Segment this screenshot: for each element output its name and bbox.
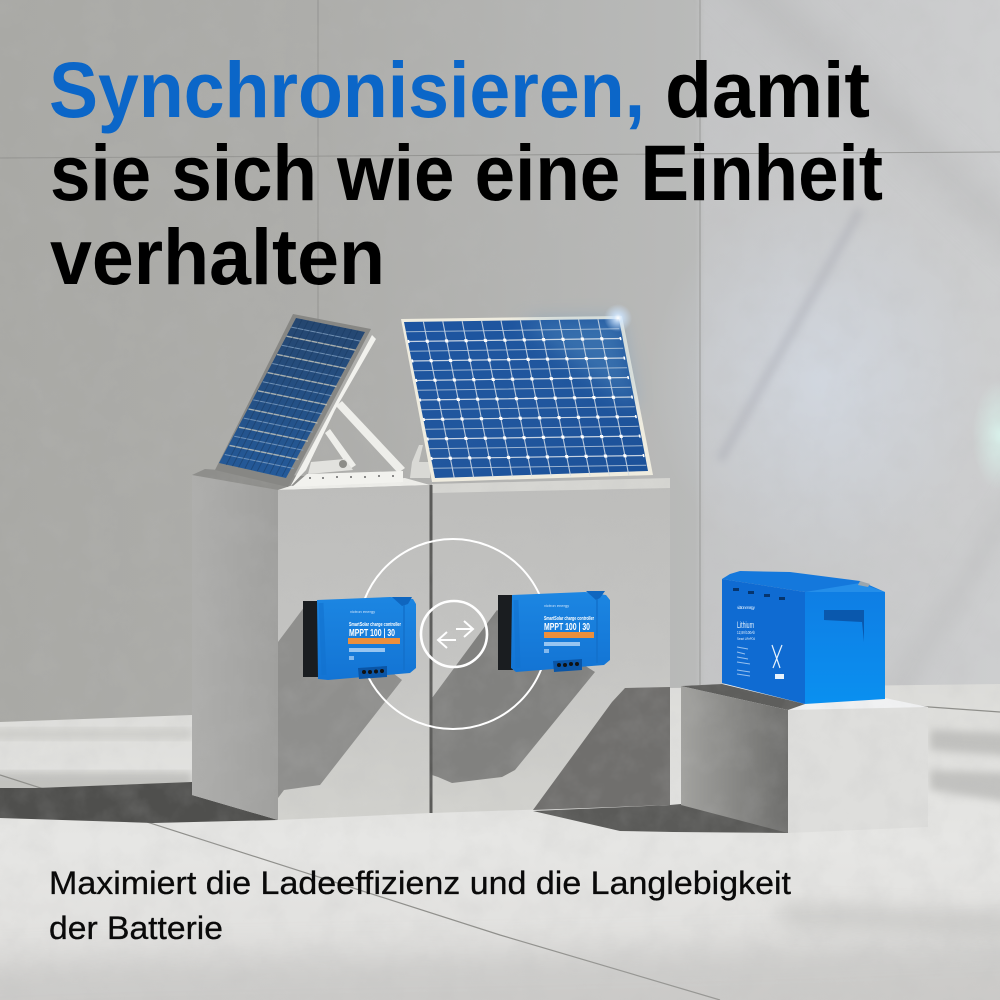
big sync ring (358, 539, 548, 729)
foot (410, 445, 430, 478)
battery block (681, 684, 928, 833)
left charge controller: MPPT 100 | 30 (349, 628, 395, 639)
right solar panel (401, 316, 653, 482)
left charge controller: victron energy (350, 609, 375, 614)
floor shadow right (533, 804, 790, 833)
cell grid (404, 319, 648, 478)
title (49, 45, 883, 301)
left solar panel with stand (215, 314, 405, 487)
subtitle: Maximiert die Ladeeffizienz und die Langlebigkeit (49, 865, 791, 901)
subtitle (49, 865, 791, 946)
right charge controller (498, 591, 610, 672)
subtitle: der Batterie (49, 910, 223, 946)
floor (0, 684, 1000, 1000)
title: verhalten (50, 212, 385, 301)
lithium battery: victron energy (737, 605, 756, 610)
lithium battery (722, 571, 885, 704)
title: damit (665, 45, 870, 134)
right charge controller: SmartSolar charge controller (544, 616, 594, 622)
left concrete block (192, 469, 430, 820)
floor shadow left (0, 782, 278, 823)
stand (325, 401, 405, 473)
lithium battery: 12,8V/100Ah (737, 630, 755, 635)
right charge controller: victron energy (544, 603, 569, 608)
right concrete block (431, 478, 670, 813)
wall background (0, 0, 1000, 730)
left charge controller: SmartSolar charge controller (349, 622, 401, 628)
stand bolts (309, 475, 394, 479)
cell lines (220, 318, 365, 478)
right charge controller: MPPT 100 | 30 (544, 622, 590, 633)
sync arrows badge (421, 601, 487, 667)
sun flare (604, 304, 632, 332)
lithium battery: Smart LiFePO4 (737, 636, 755, 641)
lithium battery: Lithium (737, 620, 754, 630)
title: Synchronisieren, (49, 45, 645, 134)
title: sie sich wie eine Einheit (50, 128, 883, 217)
left charge controller (303, 597, 416, 680)
